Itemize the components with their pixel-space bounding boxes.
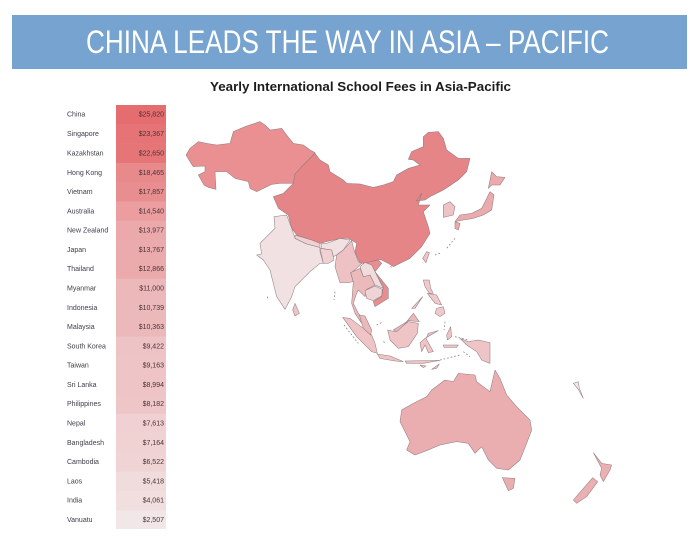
ranked fee table: Bangladesh bbox=[67, 440, 104, 447]
map: Asia-Pacific choropleth bbox=[186, 122, 612, 503]
Malaysia bbox=[359, 313, 419, 335]
ranked fee table: $5,418 bbox=[143, 478, 164, 485]
ranked fee table: Australia bbox=[67, 208, 94, 215]
ranked fee table: Nepal bbox=[67, 420, 86, 428]
ranked fee table: $9,422 bbox=[143, 343, 164, 350]
ranked fee table: Indonesia bbox=[67, 305, 97, 312]
Cambodia bbox=[365, 286, 382, 301]
title banner bbox=[12, 15, 687, 69]
Hainan and small island chains bbox=[267, 238, 455, 300]
Sri Lanka bbox=[293, 303, 299, 316]
ranked fee table: $14,540 bbox=[139, 208, 164, 215]
Bangladesh bbox=[320, 248, 334, 263]
ranked fee table: Vietnam bbox=[67, 189, 93, 196]
ranked fee table: $9,163 bbox=[143, 363, 164, 370]
chart subtitle: Yearly International School Fees in Asia-Pacific bbox=[210, 79, 511, 94]
ranked fee table: $25,820 bbox=[139, 112, 164, 118]
Kazakhstan bbox=[186, 122, 315, 192]
ranked fee table: Myanmar bbox=[67, 286, 97, 292]
ranked fee table: China bbox=[67, 112, 85, 118]
ranked fee table: $6,522 bbox=[143, 459, 164, 466]
ranked fee table: Vanuatu bbox=[67, 517, 93, 524]
Japan bbox=[455, 172, 505, 230]
ranked fee table: New Zealand bbox=[67, 228, 108, 235]
ranked fee table: $13,767 bbox=[139, 247, 164, 254]
Australia bbox=[400, 370, 532, 491]
ranked fee table: Japan bbox=[67, 247, 86, 254]
Laos bbox=[360, 262, 383, 288]
ranked fee table: Cambodia bbox=[67, 459, 99, 466]
ranked fee table: $23,367 bbox=[139, 131, 164, 138]
ranked fee table: $10,739 bbox=[139, 305, 164, 312]
ranked fee table: Malaysia bbox=[67, 324, 95, 331]
ranked fee table: $11,000 bbox=[139, 286, 164, 292]
ranked fee table: $4,061 bbox=[143, 498, 164, 505]
South Korea bbox=[443, 202, 455, 217]
ranked fee table: Thailand bbox=[67, 266, 94, 273]
map: mainland and north-east Asia bbox=[186, 122, 505, 323]
China bbox=[273, 132, 470, 267]
ranked fee table: $7,613 bbox=[143, 420, 164, 428]
Indonesia bbox=[343, 317, 490, 369]
ranked fee table: Taiwan bbox=[67, 363, 89, 370]
ranked fee table: $12,866 bbox=[139, 266, 164, 273]
Thailand bbox=[351, 268, 375, 323]
New Zealand bbox=[573, 453, 612, 503]
ranked fee table: Hong Kong bbox=[67, 170, 102, 177]
ranked fee table: $13,977 bbox=[139, 228, 164, 235]
ranked fee table: $8,994 bbox=[143, 382, 164, 389]
Indonesian small islands bbox=[344, 322, 470, 360]
ranked fee table: Laos bbox=[67, 478, 83, 485]
ranked fee table: Kazakhstan bbox=[67, 150, 104, 158]
ranked fee table bbox=[67, 105, 166, 529]
ranked fee table: $18,465 bbox=[139, 170, 164, 177]
ranked fee table: $7,164 bbox=[143, 440, 164, 447]
ranked fee table: $2,507 bbox=[143, 517, 164, 524]
ranked fee table: Philippines bbox=[67, 401, 101, 408]
India: north-east bbox=[322, 238, 350, 257]
Vietnam bbox=[363, 260, 388, 307]
ranked fee table: Singapore bbox=[67, 131, 99, 138]
ranked fee table: Sri Lanka bbox=[67, 382, 97, 389]
Myanmar bbox=[335, 241, 362, 283]
map: Oceania bbox=[400, 370, 612, 503]
ranked fee table: $22,650 bbox=[139, 150, 164, 158]
India bbox=[257, 215, 323, 309]
Nepal bbox=[295, 235, 320, 247]
ranked fee table: $17,857 bbox=[139, 189, 164, 196]
Taiwan bbox=[423, 252, 429, 263]
ranked fee table: $8,182 bbox=[143, 401, 164, 408]
ranked fee table: $10,363 bbox=[139, 324, 164, 331]
Vanuatu bbox=[573, 382, 583, 398]
ranked fee table: India bbox=[67, 498, 82, 505]
map: maritime South-East Asia bbox=[343, 280, 490, 369]
ranked fee table: South Korea bbox=[67, 343, 106, 350]
Philippines bbox=[412, 280, 445, 317]
